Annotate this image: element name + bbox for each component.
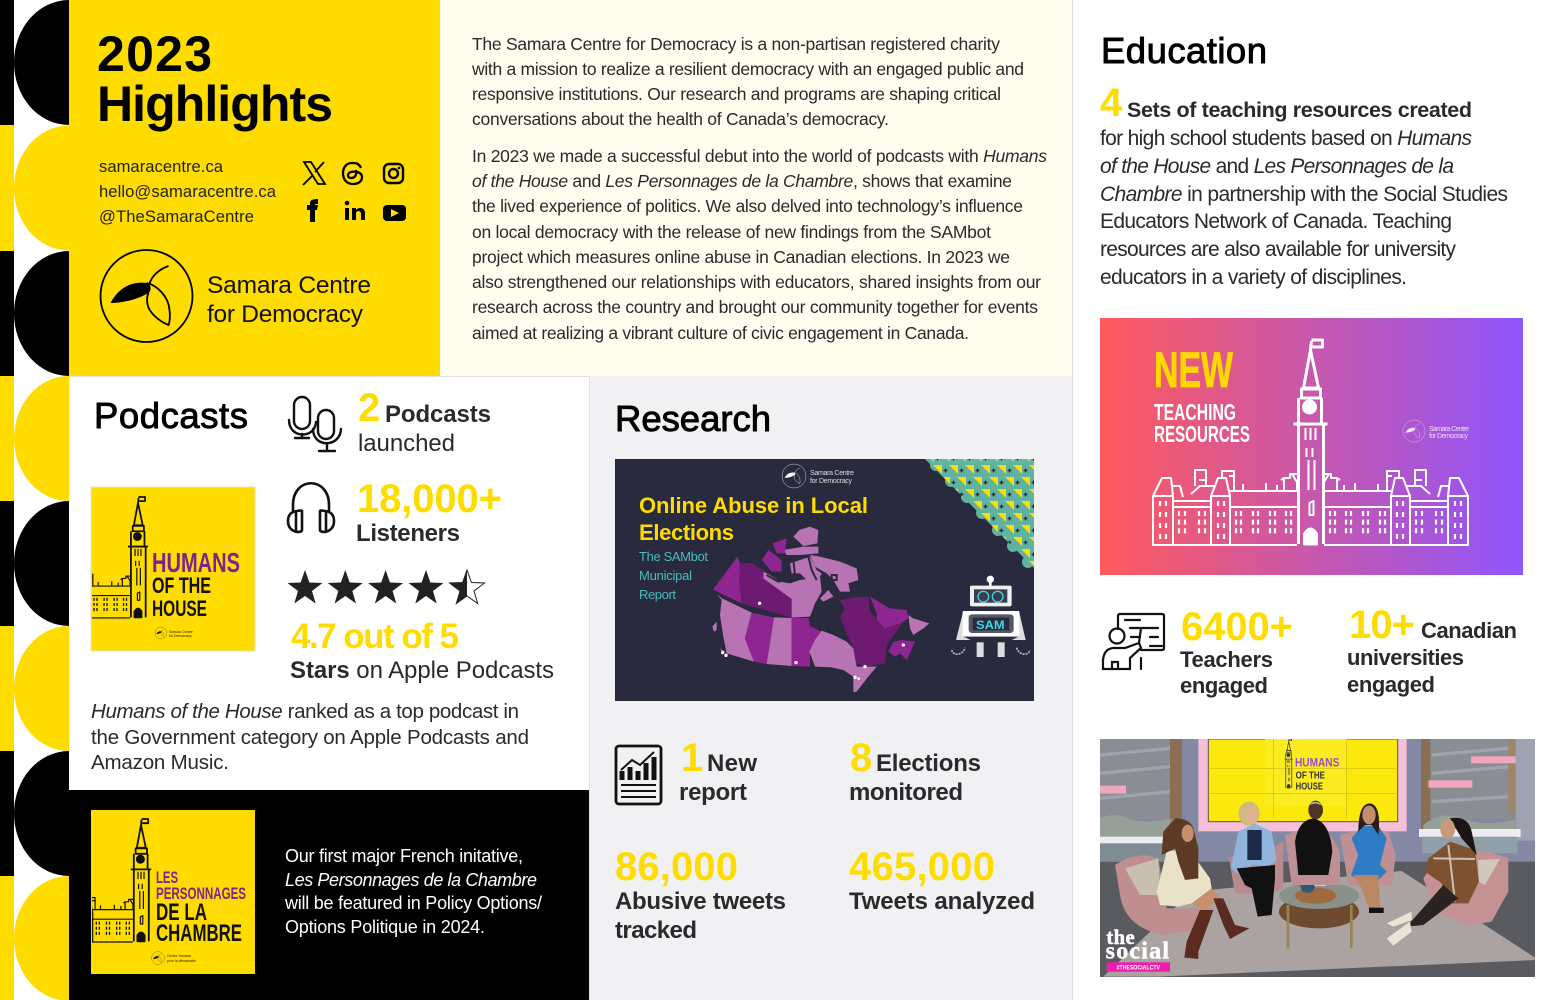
text: mission: responsive institutions. Our research and programs are shaping critical — [472, 84, 1001, 104]
text: 2023 summary: of the House and Les Personnages de la Chambre, shows that examine — [472, 171, 1012, 191]
parliament drawing — [1153, 340, 1468, 545]
stat: elections monitored — [849, 736, 981, 806]
contact details: @TheSamaraCentre — [99, 207, 254, 226]
stat: new report: New — [707, 750, 757, 777]
text: mission: conversations about the health of Canada’s democracy. — [472, 109, 889, 129]
photo: the social tv panel: HUMANS — [1295, 756, 1339, 770]
text: teaching resources: for high school students based on Humans — [1100, 127, 1472, 150]
report title — [640, 497, 866, 540]
panel: research — [589, 376, 1072, 1000]
logo: the social: social — [1106, 938, 1169, 964]
cover: les personnages de la chambre: Centre Samara — [167, 954, 191, 958]
text: teaching resources: educators in a variety of disciplines. — [1100, 266, 1407, 289]
text: teaching resources: of the House and Les Personnages de la — [1100, 155, 1454, 178]
banner: new teaching resources — [1100, 318, 1523, 575]
stat: tweets analyzed: 465,000 — [849, 845, 995, 889]
text: teaching resources: resources are also available for university — [1100, 238, 1456, 261]
stat: tweets analyzed — [849, 845, 1035, 915]
photo: the social tv panel: #THESOCIALCTV — [1117, 964, 1160, 971]
report subtitle: The SAMbot — [639, 549, 708, 564]
text: french initiative: will be featured in Policy Options/ — [284, 893, 542, 913]
text: 2023 summary: the lived experience of politics. We also delved into technology’s influence — [472, 196, 1023, 216]
logo: the social: the — [1106, 927, 1135, 949]
text: teaching resources — [1100, 127, 1508, 289]
cover: les personnages de la chambre: DE LA — [156, 899, 207, 926]
report cover: online abuse: Samara Centre — [810, 470, 854, 477]
text: french initiative: Les Personnages de la Chambre — [285, 870, 537, 890]
stat: universities engaged: 10+ — [1349, 603, 1415, 647]
icon: report chart — [616, 746, 661, 804]
contact details — [99, 157, 277, 226]
text: ranking — [91, 700, 529, 774]
title: Highlights — [97, 76, 333, 132]
stat: podcasts launched: Podcasts — [385, 401, 491, 428]
icon: teacher — [1103, 614, 1164, 669]
stat: abusive tweets: Abusive tweets — [615, 888, 786, 915]
guest three — [1295, 818, 1332, 875]
stat: universities engaged — [1347, 603, 1517, 697]
icon: headphones — [288, 483, 334, 532]
stat: abusive tweets: tracked — [615, 917, 697, 944]
text: 2023 summary: aimed at realizing a vibrant culture of civic engagement in Canada. — [472, 323, 969, 343]
stat: listeners: 18,000+ — [357, 477, 502, 521]
stat: teaching resources: 4 — [1100, 81, 1123, 125]
stat: teaching resources — [1100, 81, 1472, 125]
small logo — [1403, 420, 1425, 442]
table — [1279, 902, 1359, 928]
stat: universities engaged: universities — [1347, 645, 1464, 670]
heading: education: Education — [1101, 30, 1267, 71]
cover: humans of the house: for Democracy — [169, 634, 192, 638]
report cover: online abuse: for Democracy — [810, 478, 852, 485]
text: 2023 summary: In 2023 we made a successful debut into the world of podcasts with Humans — [472, 146, 1047, 166]
cover: humans of the house — [90, 486, 256, 652]
banner: new teaching resources: for Democracy — [1429, 433, 1468, 440]
panel: podcasts — [45, 376, 589, 790]
contact details: samaracentre.ca — [99, 157, 224, 176]
icon: samara logo — [100, 250, 192, 342]
panel: header — [69, 0, 440, 376]
text: french initiative: Options Politique in 2024. — [285, 917, 485, 937]
title: 2023 — [97, 26, 212, 82]
decorative corner pattern — [925, 459, 1034, 568]
icon: social media — [303, 162, 406, 222]
stat: podcasts launched: launched — [358, 430, 455, 457]
tv screen — [1198, 739, 1407, 831]
stat: podcasts launched: 2 — [358, 386, 380, 430]
heading: podcasts: Podcasts — [94, 395, 248, 436]
cover: les personnages de la chambre: PERSONNAGES — [156, 884, 246, 903]
guest four — [1351, 826, 1387, 880]
stat: teachers engaged: engaged — [1180, 673, 1268, 698]
stat: listeners — [356, 477, 502, 547]
stat: rating — [290, 617, 554, 684]
stat: elections monitored: 8 — [850, 736, 872, 780]
organisation name — [207, 272, 371, 328]
photo: the social tv panel: OF THE — [1296, 770, 1325, 781]
cover: humans of the house: HUMANS — [152, 547, 240, 578]
panel: education — [1072, 0, 1536, 1000]
cover: humans of the house: OF THE — [152, 573, 211, 598]
organisation name: Samara Centre — [207, 272, 371, 299]
text: mission: The Samara Centre for Democracy is a non-partisan registered charity — [472, 34, 1000, 54]
stat: new report — [679, 736, 757, 806]
cover: les personnages de la chambre: CHAMBRE — [156, 920, 242, 947]
small logo — [782, 464, 806, 488]
guest five host — [1425, 842, 1479, 903]
text: 2023 summary: project which measures online abuse in Canadian elections. In 2023 we — [472, 247, 1010, 267]
stat: teachers engaged: Teachers — [1180, 647, 1273, 672]
panel: introduction — [440, 0, 1072, 376]
organisation name: for Democracy — [207, 301, 364, 328]
text: 2023 summary: on local democracy with the release of new findings from the SAMbot — [472, 222, 991, 242]
text: 2023 summary: also strengthened our relationships with educators, shared insights from our — [472, 272, 1041, 292]
logo: the social — [1106, 929, 1169, 959]
stat: new report: report — [679, 779, 747, 806]
banner: new teaching resources: NEW — [1154, 342, 1234, 398]
text: mission: with a mission to realize a resilient democracy with an engaged public and — [471, 59, 1024, 79]
heading: research: Research — [615, 398, 771, 439]
banner: new teaching resources: RESOURCES — [1154, 421, 1250, 447]
stat: rating: Stars on Apple Podcasts — [290, 657, 554, 684]
report title: Online Abuse in Local — [639, 493, 868, 518]
left decorative strip — [0, 0, 124, 1000]
stat: elections monitored: Elections — [876, 750, 981, 777]
stat: universities engaged: Canadian — [1421, 618, 1517, 643]
text: teaching resources: Chambre in partnership with the Social Studies — [1100, 183, 1508, 206]
text: mission — [471, 34, 1024, 129]
photo: the social tv panel — [1099, 739, 1536, 979]
text: teaching resources: Educators Network of Canada. Teaching — [1100, 210, 1452, 233]
stat: abusive tweets: 86,000 — [615, 845, 738, 889]
stat: teachers engaged: 6400+ — [1181, 605, 1293, 649]
chairs — [1115, 855, 1212, 935]
photo: the social tv panel: HOUSE — [1296, 781, 1323, 792]
cover: les personnages de la chambre: pour la démocratie — [167, 959, 196, 963]
cover: les personnages de la chambre — [91, 810, 255, 974]
panel: french podcast — [46, 790, 589, 1000]
banner: new teaching resources: Samara Centre — [1429, 426, 1469, 433]
stat: abusive tweets — [615, 845, 786, 944]
guest one — [1157, 848, 1212, 907]
cover: humans of the house: HOUSE — [152, 596, 207, 621]
text: ranking: Amazon Music. — [91, 751, 229, 774]
stat: teaching resources: Sets of teaching resources created — [1127, 98, 1472, 122]
text: ranking: the Government category on Apple Podcasts and — [91, 726, 529, 749]
text: 2023 summary: research across the country and brought our community together for events — [472, 297, 1038, 317]
icon: sam robot — [952, 576, 1030, 657]
rug — [1103, 871, 1535, 977]
cover: humans of the house: Samara Centre — [169, 630, 193, 634]
map of canada — [712, 527, 929, 692]
stat: teachers engaged — [1180, 605, 1293, 698]
icon: star rating — [288, 570, 484, 604]
report cover: online abuse — [615, 459, 1034, 701]
stat: new report: 1 — [681, 736, 703, 780]
icon: sam robot: SAM — [976, 618, 1005, 632]
banner: new teaching resources: TEACHING — [1154, 399, 1236, 425]
guest two — [1231, 823, 1277, 875]
text: ranking: Humans of the House ranked as a top podcast in — [91, 700, 519, 723]
report subtitle: Report — [639, 587, 676, 602]
stat: tweets analyzed: Tweets analyzed — [849, 888, 1035, 915]
title — [97, 26, 333, 132]
contact details: hello@samaracentre.ca — [99, 182, 277, 201]
icon: microphones — [289, 397, 341, 451]
stat: universities engaged: engaged — [1347, 672, 1435, 697]
stat: rating: 4.7 out of 5 — [291, 617, 459, 656]
stat: podcasts launched — [358, 386, 491, 457]
stat: listeners: Listeners — [356, 520, 460, 547]
report subtitle: Municipal — [639, 568, 692, 583]
text: french initiative: Our first major French initative, — [285, 846, 523, 866]
cover: les personnages de la chambre: LES — [156, 868, 178, 887]
text: 2023 summary — [472, 146, 1047, 343]
report subtitle — [639, 549, 708, 602]
text: french initiative — [284, 846, 542, 937]
report title: Elections — [639, 520, 734, 545]
stat: elections monitored: monitored — [849, 779, 963, 806]
